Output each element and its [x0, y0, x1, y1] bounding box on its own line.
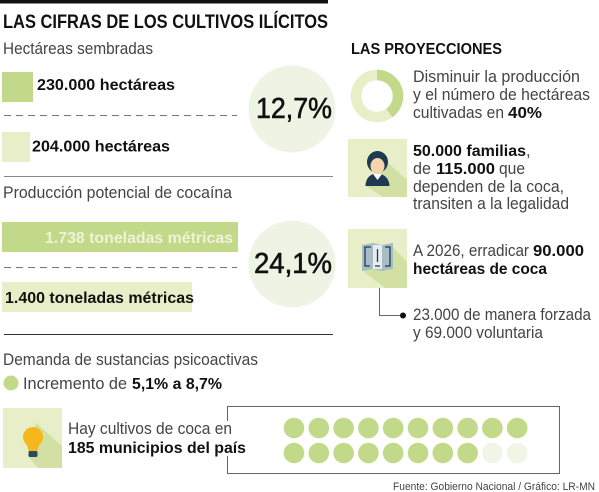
bar: 1.738 toneladas: 1.738 toneladas métricas — [45, 230, 233, 247]
text: disminuir — [413, 68, 590, 122]
panel: demanda — [3, 351, 258, 393]
230.000 hectáreas label: 230.000 hectáreas — [37, 77, 175, 94]
text: familias: , — [526, 142, 531, 160]
text: erradicar — [413, 242, 584, 278]
incremento text: Incremento de — [23, 375, 127, 393]
text: erradicar: hectáreas de coca — [413, 261, 547, 278]
bar: 1.738 toneladas — [2, 222, 238, 252]
panel: producción potencial — [2, 184, 336, 312]
text: disminuir: Disminuir la producción — [413, 68, 580, 86]
dot grid: municipios — [284, 418, 528, 463]
municipios text: Hay cultivos de coca en — [68, 420, 232, 438]
icon: person — [348, 139, 407, 197]
text: disminuir: 40% — [508, 105, 542, 122]
icon: light bulb — [3, 408, 62, 468]
title: LAS CIFRAS DE LOS CULTIVOS ILÍCITOS — [3, 11, 328, 33]
text: familias: que — [499, 160, 525, 178]
percentage circle 24,1%: 24,1% — [254, 248, 332, 280]
text: forzada y voluntaria: y 69.000 voluntaria — [413, 324, 544, 342]
bar: 1.400 toneladas — [2, 282, 194, 312]
panel: las proyecciones — [348, 41, 592, 342]
box outline — [228, 406, 560, 474]
text: erradicar: 90.000 — [533, 243, 584, 260]
heading: hectáreas sembradas: Hectáreas sembradas — [3, 40, 153, 58]
text: familias: transiten a la legalidad — [413, 195, 569, 213]
text: erradicar: A 2026, erradicar — [413, 242, 529, 260]
municipios text: 185 municipios del país — [68, 440, 246, 457]
percentage circle 12,7% — [248, 66, 336, 152]
text: disminuir: y el número de hectáreas — [413, 86, 590, 104]
204.000 hectáreas label: 204.000 hectáreas — [32, 138, 170, 156]
text: familias — [413, 142, 569, 213]
incremento text — [23, 375, 222, 393]
heading: las proyecciones: LAS PROYECCIONES — [351, 41, 502, 58]
municipios text — [68, 420, 246, 457]
text: forzada y voluntaria — [413, 306, 592, 342]
text: disminuir: cultivadas en — [413, 104, 504, 122]
icon: map — [348, 229, 407, 288]
heading: producción potencial de cocaína: Producción potencial de cocaína — [3, 184, 233, 202]
text: familias: dependen de la coca, — [413, 178, 564, 196]
panel: municipios — [3, 406, 560, 474]
percentage circle 12,7%: 12,7% — [256, 93, 332, 125]
text: familias: 50.000 familias — [413, 143, 526, 160]
bullet dot — [4, 376, 18, 390]
230.000 hectáreas square — [2, 72, 33, 102]
panel: hectáreas sembradas — [2, 40, 336, 162]
text: familias: de — [413, 160, 431, 178]
bar: 1.400 toneladas: 1.400 toneladas métricas — [5, 290, 194, 307]
connector line with dot — [380, 288, 406, 318]
donut chart 40% — [356, 75, 398, 117]
204.000 hectáreas square — [2, 132, 30, 162]
percentage circle 24,1% — [248, 220, 336, 308]
text: familias: 115.000 — [436, 161, 495, 178]
heading: demanda de sustancias: Demanda de sustancias psicoactivas — [3, 351, 258, 369]
incremento text: 5,1% a 8,7% — [132, 376, 222, 393]
